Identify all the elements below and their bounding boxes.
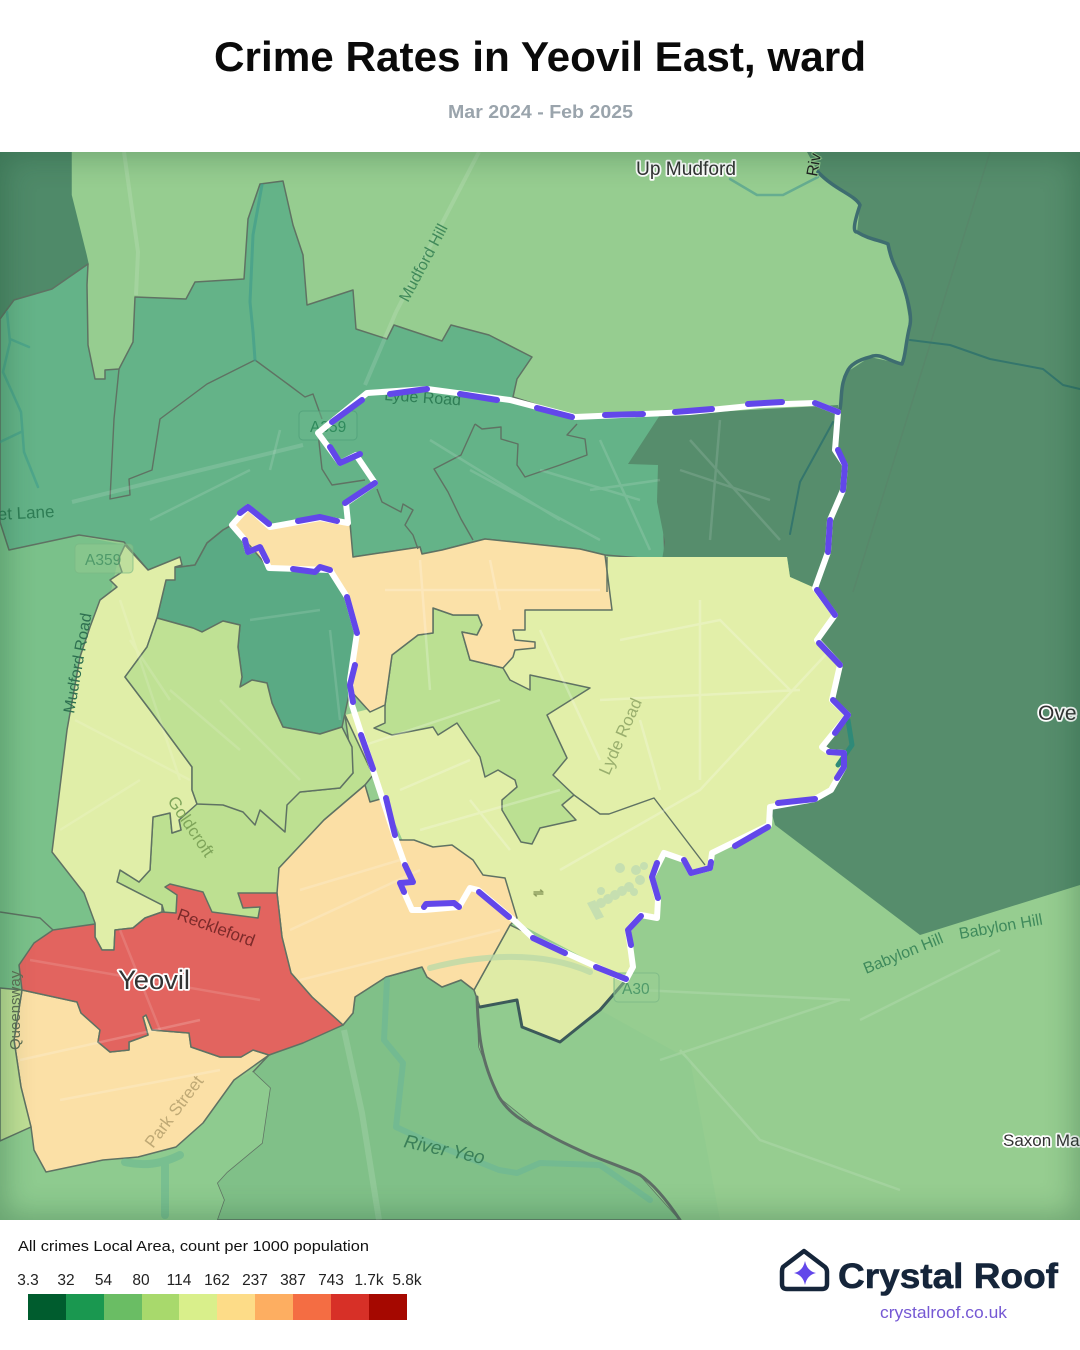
map edge vignette bbox=[0, 152, 1080, 1220]
ward: west centre green bbox=[148, 525, 357, 734]
legend scale values: 5.8k bbox=[392, 1272, 422, 1289]
legend scale values bbox=[17, 1272, 422, 1289]
logo wordmark: Crystal Roof bbox=[838, 1257, 1058, 1296]
ward: left strip bbox=[0, 520, 125, 990]
ward: west lime bbox=[125, 618, 353, 832]
subtitle: date range: Mar 2024 - Feb 2025 bbox=[448, 102, 633, 122]
road shield: A359 west bbox=[75, 544, 133, 573]
label: Saxon Ma: Saxon Ma bbox=[1003, 1131, 1080, 1150]
railway station icon: ⇌ bbox=[533, 885, 544, 900]
road shield: A30: A30 bbox=[622, 981, 650, 998]
ward: south-east green sliver bbox=[479, 1000, 720, 1220]
legend colour bar bbox=[28, 1294, 407, 1320]
label: Queensway: Queensway bbox=[7, 970, 24, 1050]
label: Reckleford: Reckleford bbox=[175, 905, 257, 951]
rivers and streams bbox=[0, 172, 1080, 1220]
title: Crime Rates in Yeovil East, ward bbox=[214, 33, 866, 80]
ward: west yellow-green bbox=[52, 545, 197, 950]
label: Lyde Road south: Lyde Road bbox=[595, 695, 646, 778]
ward: east dark bbox=[770, 152, 1080, 935]
label: Babylon Hill west: Babylon Hill bbox=[861, 930, 946, 978]
road shield: A359 north bbox=[299, 411, 357, 440]
road shield: A30 bbox=[614, 973, 659, 1002]
road shield: A359 north: A359 bbox=[310, 419, 346, 436]
choropleth map bbox=[0, 152, 1080, 1220]
ward: south-west cream bbox=[14, 990, 269, 1172]
legend scale values: 3.3 bbox=[17, 1272, 39, 1289]
ward: central south cream bbox=[277, 785, 517, 1025]
legend scale values: 54 bbox=[95, 1272, 112, 1289]
legend scale values: 1.7k bbox=[354, 1272, 384, 1289]
label: River Yeo: River Yeo bbox=[402, 1131, 487, 1169]
label: Goldcroft: Goldcroft bbox=[164, 793, 218, 861]
road shield: A359 west: A359 bbox=[85, 552, 121, 569]
label: Babylon Hill east: Babylon Hill bbox=[958, 912, 1044, 943]
legend scale values: 162 bbox=[204, 1272, 230, 1289]
ward: south green bbox=[217, 967, 680, 1220]
label: Mudford Road: Mudford Road bbox=[61, 612, 96, 715]
ward: north-west dark corner bbox=[0, 152, 88, 319]
ward: north cream bbox=[232, 507, 612, 712]
icon: house with star bbox=[782, 1251, 827, 1289]
logo: Crystal Roof bbox=[780, 1248, 1058, 1322]
ward: south lime bbox=[117, 715, 373, 925]
label: river partial: Riv bbox=[804, 152, 825, 178]
label: Yeovil: Yeovil bbox=[118, 965, 190, 995]
label: Ove: Ove bbox=[1038, 702, 1077, 725]
ward: inner dark estate bbox=[628, 405, 838, 588]
label: Lyde Road north: Lyde Road bbox=[384, 387, 462, 409]
legend scale values: 80 bbox=[132, 1272, 150, 1289]
legend scale values: 387 bbox=[280, 1272, 306, 1289]
legend bbox=[17, 1238, 422, 1320]
road and place labels bbox=[0, 152, 1080, 1169]
legend scale values: 114 bbox=[167, 1272, 192, 1289]
ward: far west lime sliver bbox=[0, 988, 31, 1141]
label: Mudford Hill: Mudford Hill bbox=[397, 222, 452, 305]
label: Park Street: Park Street bbox=[141, 1072, 208, 1151]
logo url: crystalroof.co.uk bbox=[880, 1304, 1008, 1322]
legend scale values: 32 bbox=[57, 1272, 75, 1289]
interior ward lines bbox=[0, 152, 990, 930]
ward: north-west mid green bbox=[0, 181, 665, 570]
ward: red high crime bbox=[19, 884, 343, 1057]
legend scale values: 237 bbox=[242, 1272, 268, 1289]
ward: small south yellow-green bbox=[474, 925, 626, 1042]
ward: main yellow-green bbox=[345, 557, 848, 980]
legend title: All crimes Local Area, count per 1000 population bbox=[18, 1238, 369, 1255]
ward boundary: Yeovil East bbox=[232, 389, 848, 980]
ponds near the station bbox=[587, 862, 648, 920]
ward: south-west woodland green bbox=[0, 1072, 270, 1220]
legend scale values: 743 bbox=[318, 1272, 344, 1289]
label: Up Mudford: Up Mudford bbox=[636, 159, 736, 180]
street network bbox=[20, 152, 1000, 1220]
ward: centre lime bbox=[374, 608, 590, 844]
